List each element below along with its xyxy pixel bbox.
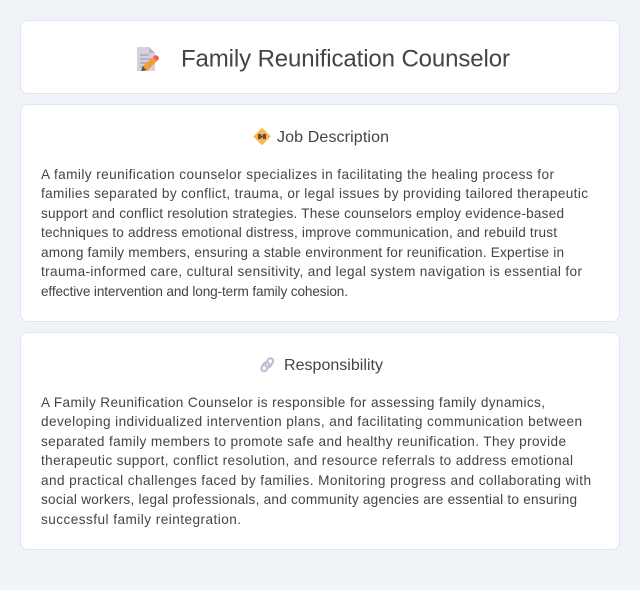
text block: responsibility [41,395,591,527]
icon: document with pencil [137,47,159,71]
panel: responsibility [20,332,620,550]
text block: responsibility: therapeutic support, conflict resolution, and resource referrals to address emotional [41,453,573,468]
text block: job description [41,167,588,299]
text block: job description: families separated by conflict, trauma, or legal issues by providing tailored therapeutic [41,186,588,201]
text block: responsibility: developing individualized intervention plans, and facilitating communication between [41,414,582,429]
text block: job description: trauma-informed care, cultural sensitivity, and legal system navigation is essential for [41,264,582,279]
text block: responsibility: separated family members to promote safe and healthy reunification. They provide [41,434,566,449]
heading: responsibility: Responsibility [284,357,383,374]
text block: job description: A family reunification counselor specializes in facilitating the healing process for [41,167,554,182]
text block: job description: support and conflict resolution strategies. These counselors employ evidence-based [41,206,564,221]
text block: job description: techniques to address emotional distress, improve communication, and rebuild trust [41,225,557,240]
panel: title card [20,20,620,94]
panel: job description [20,104,620,322]
icon: orange diamond [254,128,270,144]
text block: job description: among family members, ensuring a stable environment for reunification. Expertise in [41,245,564,260]
icon: chain link [260,357,274,372]
title: Family Reunification Counselor [181,46,510,72]
text block: job description: effective intervention and long-term family cohesion. [41,284,348,299]
text block: responsibility: and practical challenges faced by families. Monitoring progress and collaborating with [41,473,591,488]
text block: responsibility: successful family reintegration. [41,512,241,527]
text block: responsibility: social workers, legal professionals, and community agencies are essential to ensuring [41,492,577,507]
heading: job description: Job Description [277,129,389,146]
text block: responsibility: A Family Reunification Counselor is responsible for assessing family dynamics, [41,395,545,410]
